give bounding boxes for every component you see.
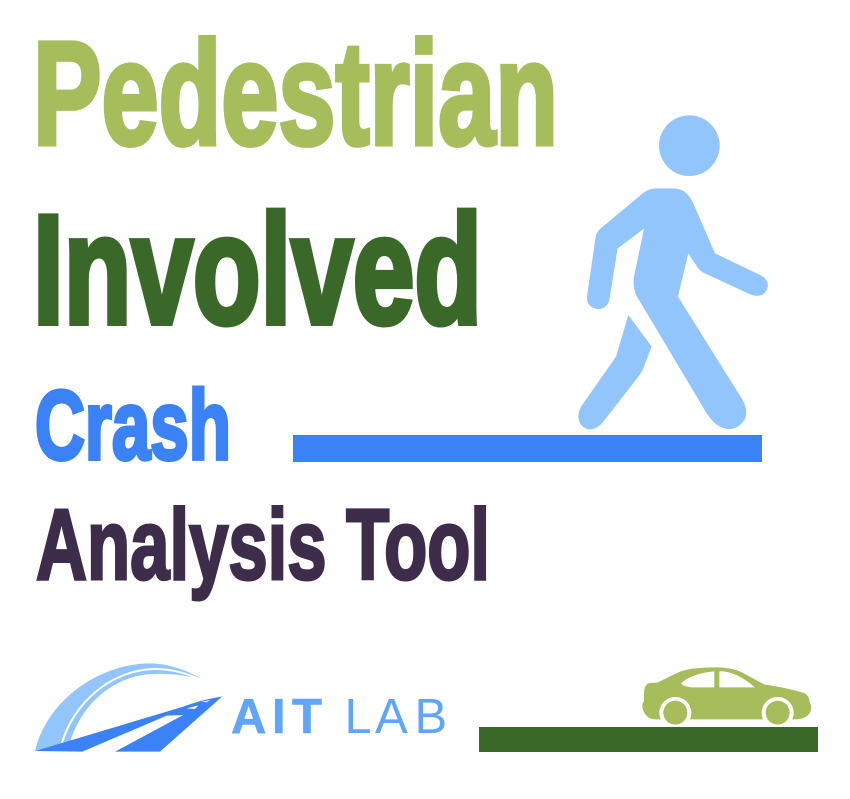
green ground bar [479, 727, 818, 752]
icon: walking pedestrian [578, 115, 768, 429]
logo icon: road and arc [35, 663, 222, 752]
icon: car [642, 667, 811, 725]
logo text: LAB: LAB [344, 690, 447, 744]
title: Involved: Involved [33, 183, 482, 356]
blue ground bar [293, 435, 762, 462]
title: Analysis Tool: Analysis Tool [36, 489, 490, 601]
title: Pedestrian: Pedestrian [33, 12, 558, 176]
logo: AIT LAB [35, 663, 447, 752]
title: Crash: Crash [35, 370, 231, 480]
logo text: AIT: AIT [231, 690, 322, 744]
